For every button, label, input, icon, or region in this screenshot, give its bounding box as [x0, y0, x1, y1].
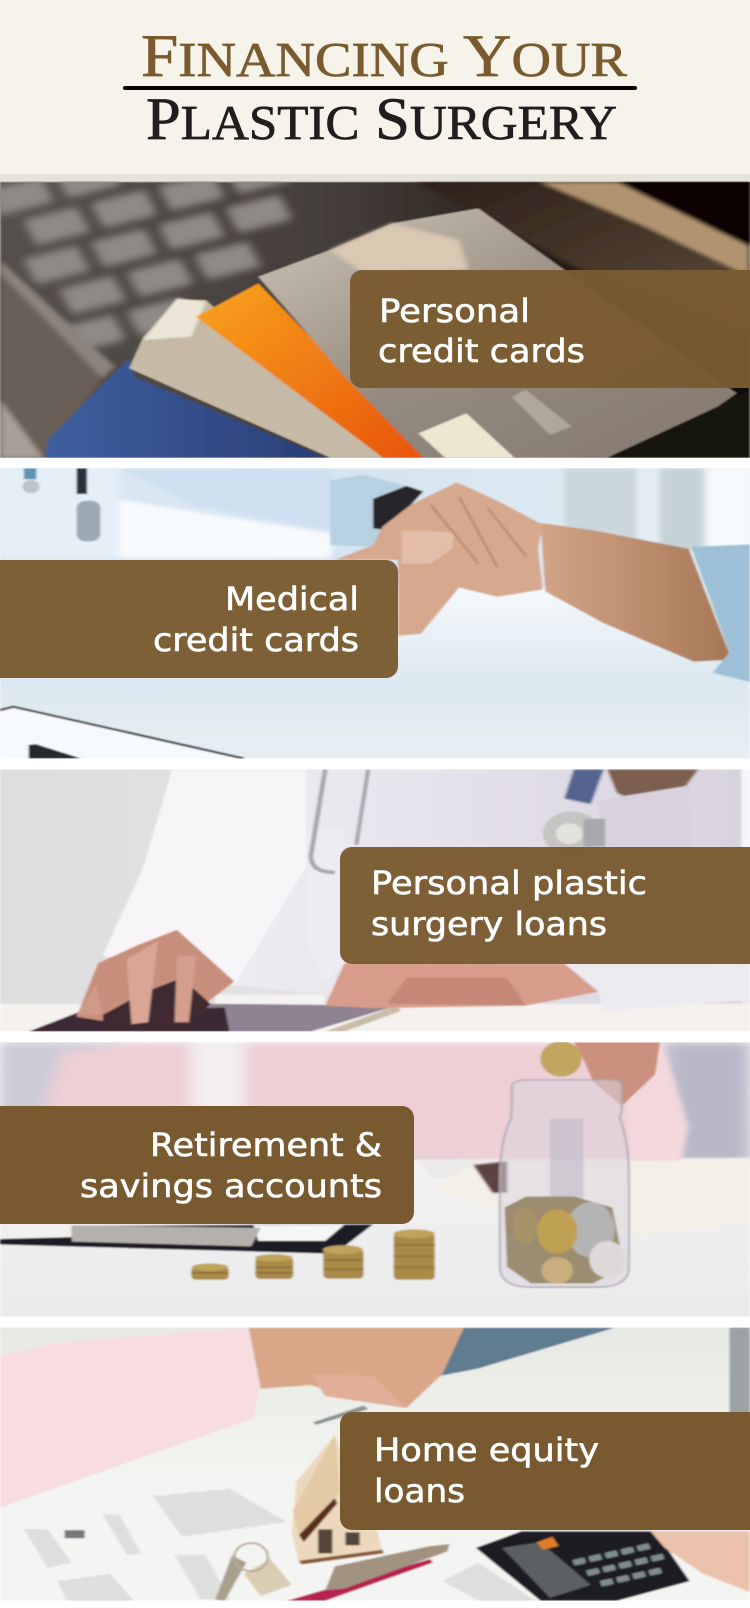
label: home equity loans: [340, 1412, 750, 1530]
photo: coins and glass jar: [0, 1041, 750, 1317]
calculator: [476, 1531, 690, 1601]
jar: [500, 1080, 629, 1287]
label: retirement and savings accounts: [0, 1106, 414, 1224]
title divider: [123, 86, 637, 90]
panel: personal credit cards: [0, 182, 750, 458]
label: personal plastic surgery loans: Personal plastic: [371, 864, 647, 902]
photo: credit cards on laptop: [0, 182, 750, 458]
panel: medical credit cards: [0, 468, 750, 759]
photo: doctor holding patient's hand: [0, 468, 750, 759]
panel: home equity loans: [0, 1327, 750, 1601]
panel: retirement and savings accounts: [0, 1041, 750, 1317]
label: medical credit cards: Medical: [225, 580, 359, 618]
label: medical credit cards: credit cards: [153, 621, 359, 659]
photo: doctor at tablet: [0, 769, 750, 1031]
title line two: PLASTIC SURGERY: [146, 86, 617, 152]
label: personal credit cards: Personal: [379, 292, 530, 330]
keys: [215, 1555, 246, 1601]
label: retirement and savings accounts: savings accounts: [80, 1167, 382, 1205]
panel: personal plastic surgery loans: [0, 769, 750, 1031]
label: retirement and savings accounts: Retirement &: [150, 1126, 382, 1164]
label: home equity loans: Home equity: [374, 1431, 599, 1469]
label: home equity loans: loans: [374, 1472, 465, 1510]
title line one: FINANCING YOUR: [141, 23, 627, 89]
label: personal credit cards: [350, 270, 750, 388]
model house: [292, 1435, 383, 1563]
label: personal plastic surgery loans: surgery loans: [371, 905, 607, 943]
hand: [650, 1531, 750, 1592]
label: personal credit cards: credit cards: [378, 332, 585, 370]
clip and red folder: [287, 1559, 433, 1601]
photo: handshake over paperwork and model house: [0, 1327, 750, 1601]
header panel: [0, 0, 750, 182]
label: medical credit cards: [0, 560, 398, 678]
label: personal plastic surgery loans: [340, 847, 750, 964]
